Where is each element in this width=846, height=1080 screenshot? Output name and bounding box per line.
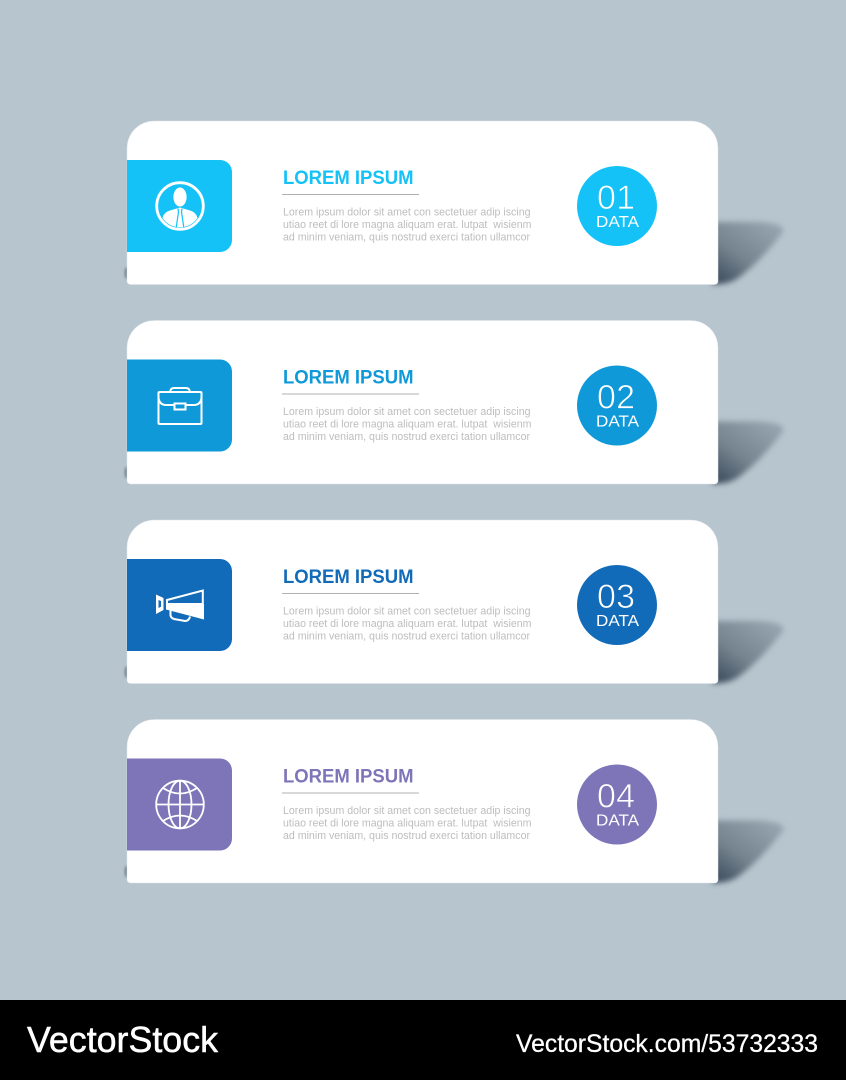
panel: step 01 — [124, 121, 783, 284]
body text 02: ad minim veniam, quis nostrud exerci tation ullamcor — [283, 431, 530, 443]
card 03 — [127, 520, 718, 684]
left shadow 03 — [124, 666, 130, 678]
rule 04 — [282, 792, 419, 794]
card shadow 01 — [712, 222, 783, 284]
card 01 — [127, 121, 718, 284]
body text 01: Lorem ipsum dolor sit amet con sectetuer adip iscing — [283, 206, 531, 218]
card shadow 03 — [712, 621, 783, 683]
badge 04: DATA — [596, 812, 639, 830]
body text 01: utiao reet di lore magna aliquam erat. lutpat wisienm — [283, 219, 532, 231]
body text 04: utiao reet di lore magna aliquam erat. lutpat wisienm — [283, 818, 532, 830]
card 04 — [127, 720, 718, 883]
body text 04: Lorem ipsum dolor sit amet con sectetuer adip iscing — [283, 805, 531, 817]
tab 02 — [127, 360, 232, 452]
body text 02: Lorem ipsum dolor sit amet con sectetuer adip iscing — [283, 406, 531, 418]
body text 04: ad minim veniam, quis nostrud exerci tation ullamcor — [283, 830, 530, 842]
badge 02: DATA — [596, 414, 639, 430]
heading 02: LOREM IPSUM — [283, 368, 414, 388]
tab 03 — [127, 559, 232, 651]
body text 01 — [283, 206, 532, 244]
card shadow 02 — [712, 422, 783, 484]
heading 03: LOREM IPSUM — [283, 567, 414, 588]
badge 03: 03 — [597, 578, 635, 616]
panel: step 04 — [124, 720, 783, 883]
body text 03: ad minim veniam, quis nostrud exerci tation ullamcor — [283, 630, 530, 642]
heading 01: LOREM IPSUM — [283, 168, 414, 189]
badge 04: 04 — [597, 778, 635, 816]
icon: person — [157, 183, 203, 229]
body text 02: utiao reet di lore magna aliquam erat. lutpat wisienm — [283, 418, 532, 430]
body text 02 — [283, 406, 532, 443]
badge 04 — [577, 764, 657, 844]
footer url: VectorStock.com/53732333 — [516, 1030, 818, 1058]
badge 01 — [577, 166, 657, 246]
body text 03 — [283, 606, 532, 642]
heading 04: LOREM IPSUM — [283, 766, 414, 788]
badge 03 — [577, 565, 657, 645]
rule 01 — [282, 194, 419, 195]
badge 01: DATA — [596, 214, 639, 231]
left shadow 01 — [124, 267, 130, 279]
icon: globe — [156, 781, 204, 828]
card 02 — [127, 320, 718, 484]
footer bar — [0, 1000, 846, 1080]
badge 02: 02 — [597, 378, 635, 416]
footer logo: VectorStock — [27, 1019, 219, 1060]
body text 03: utiao reet di lore magna aliquam erat. lutpat wisienm — [283, 618, 532, 630]
panel: step 03 — [124, 520, 783, 684]
panel: step 02 — [124, 320, 783, 484]
badge 01: 01 — [597, 179, 635, 217]
tab 01 — [127, 160, 232, 252]
icon: megaphone — [156, 590, 204, 621]
left shadow 02 — [124, 466, 130, 478]
left shadow 04 — [124, 866, 130, 878]
rule 02 — [282, 394, 419, 395]
badge 03: DATA — [596, 613, 639, 630]
rule 03 — [282, 593, 419, 594]
badge 02 — [577, 366, 657, 446]
tab 04 — [127, 758, 232, 850]
body text 03: Lorem ipsum dolor sit amet con sectetuer adip iscing — [283, 606, 531, 618]
card shadow 04 — [712, 820, 783, 883]
body text 01: ad minim veniam, quis nostrud exerci tation ullamcor — [283, 232, 530, 244]
body text 04 — [283, 805, 532, 842]
icon: briefcase — [158, 388, 202, 424]
